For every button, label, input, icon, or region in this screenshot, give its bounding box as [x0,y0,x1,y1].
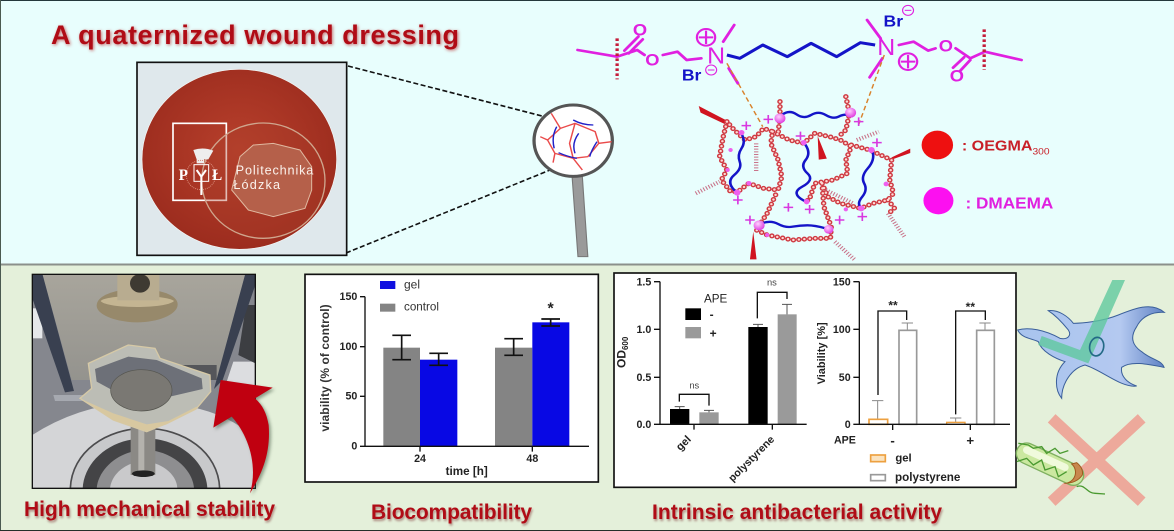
bar chart: viability over time: viability (% of control) [318,304,332,432]
icon: magnifying glass [534,105,612,257]
photo: dressing on Lodz University of Technology logo [137,62,347,255]
molecule: quaternized crosslinker structure: O [645,50,660,69]
bar chart: viability over time: time [h] [446,465,488,478]
bar chart: OD600: polystyrene [726,434,777,484]
bar chart: OD600: ns [689,380,700,390]
molecule: quaternized crosslinker structure [578,5,1022,127]
photo: gel on rheometer plate [32,274,273,493]
icon: mammalian cell with check mark [1018,280,1164,398]
bar chart: viability percent: polystyrene [895,471,961,484]
photo: dressing on Lodz University of Technology logo: P [179,167,188,184]
photo: dressing on Lodz University of Technology logo: Łódzka [233,178,281,192]
molecule: quaternized crosslinker structure: O [939,36,953,55]
molecule: quaternized crosslinker structure: O [950,66,964,85]
legend: gel and control [380,278,439,314]
bar chart: viability percent: Viability [%] [816,322,828,384]
heading: Intrinsic antibacterial activity: Intrinsic antibacterial activity [652,501,942,524]
molecule: quaternized crosslinker structure: Br [884,12,904,30]
photo: dressing on Lodz University of Technology logo: Politechnika [236,164,314,178]
molecule: quaternized crosslinker structure: O [633,20,647,39]
bar chart: OD600: OD [614,350,628,368]
diagram: crosslinked polymer network [696,97,910,260]
bar chart: viability over time: 100 [340,341,357,353]
bar chart: OD600: 1.5 [637,276,651,288]
bar chart: viability percent: ** [966,300,975,314]
bar chart: viability percent: ** [888,298,898,312]
bar chart: viability over time: 50 [345,391,357,403]
bar chart: viability percent: gel [895,453,912,465]
title: A quaternized wound dressing [51,20,459,50]
bar chart: OD600: 600 [621,336,630,350]
heading: Biocompatibility: Biocompatibility [371,501,532,524]
bar chart: OD600: + [710,326,717,340]
panel: top hydrogel background [0,0,1174,264]
connector: dashed zoom lines [346,66,555,253]
bar chart: viability percent [816,276,1010,484]
bar chart: viability over time: 24 [414,453,426,465]
bar chart: viability over time: * [548,300,555,317]
bar chart: viability over time [305,274,598,482]
panel: bottom results background [0,264,1174,531]
icon: bacterium crossed out [1017,418,1142,502]
legend: OEGMA300: 300 [1032,147,1050,157]
bar chart: OD600 [614,276,807,484]
arrow: red curved arrow [213,380,273,493]
bar chart: OD600: 0.0 [637,419,651,431]
bar chart: OD600: 0.5 [637,372,651,384]
bar chart: OD600: 1.0 [637,324,651,336]
molecule: quaternized crosslinker structure: N [877,35,895,61]
photo: dressing on Lodz University of Technology logo: Ł [212,167,222,184]
bar chart: OD600: APE [704,292,728,305]
bar chart: viability percent: APE [834,434,856,446]
charts: antibacterial activity [614,273,1016,487]
bar chart: viability percent: 0 [845,419,851,431]
bar chart: viability percent: 50 [839,372,851,384]
bar chart: viability over time: 0 [351,441,357,453]
legend: gel and control: gel [404,278,420,292]
bar chart: OD600: gel [674,434,694,453]
molecule: quaternized crosslinker structure: N [707,43,725,69]
legend: DMAEMA: : DMAEMA [966,195,1053,212]
bar chart: viability percent: 150 [833,276,851,288]
bar chart: viability percent: - [890,433,895,448]
legend: OEGMA300 [922,131,1050,159]
bar chart: viability percent: + [966,433,974,448]
molecule: quaternized crosslinker structure: Br [682,66,702,84]
bar chart: viability percent: 100 [833,324,851,336]
bar chart: viability over time: 48 [526,453,538,465]
bar chart: OD600: ns [767,278,777,288]
legend: OEGMA300: : OEGMA [962,138,1032,154]
legend: DMAEMA [923,187,1053,214]
heading: High mechanical stability: High mechanical stability [24,498,275,521]
legend: gel and control: control [404,301,439,314]
bar chart: viability over time: 150 [340,291,357,303]
bar chart: OD600: - [710,307,714,321]
